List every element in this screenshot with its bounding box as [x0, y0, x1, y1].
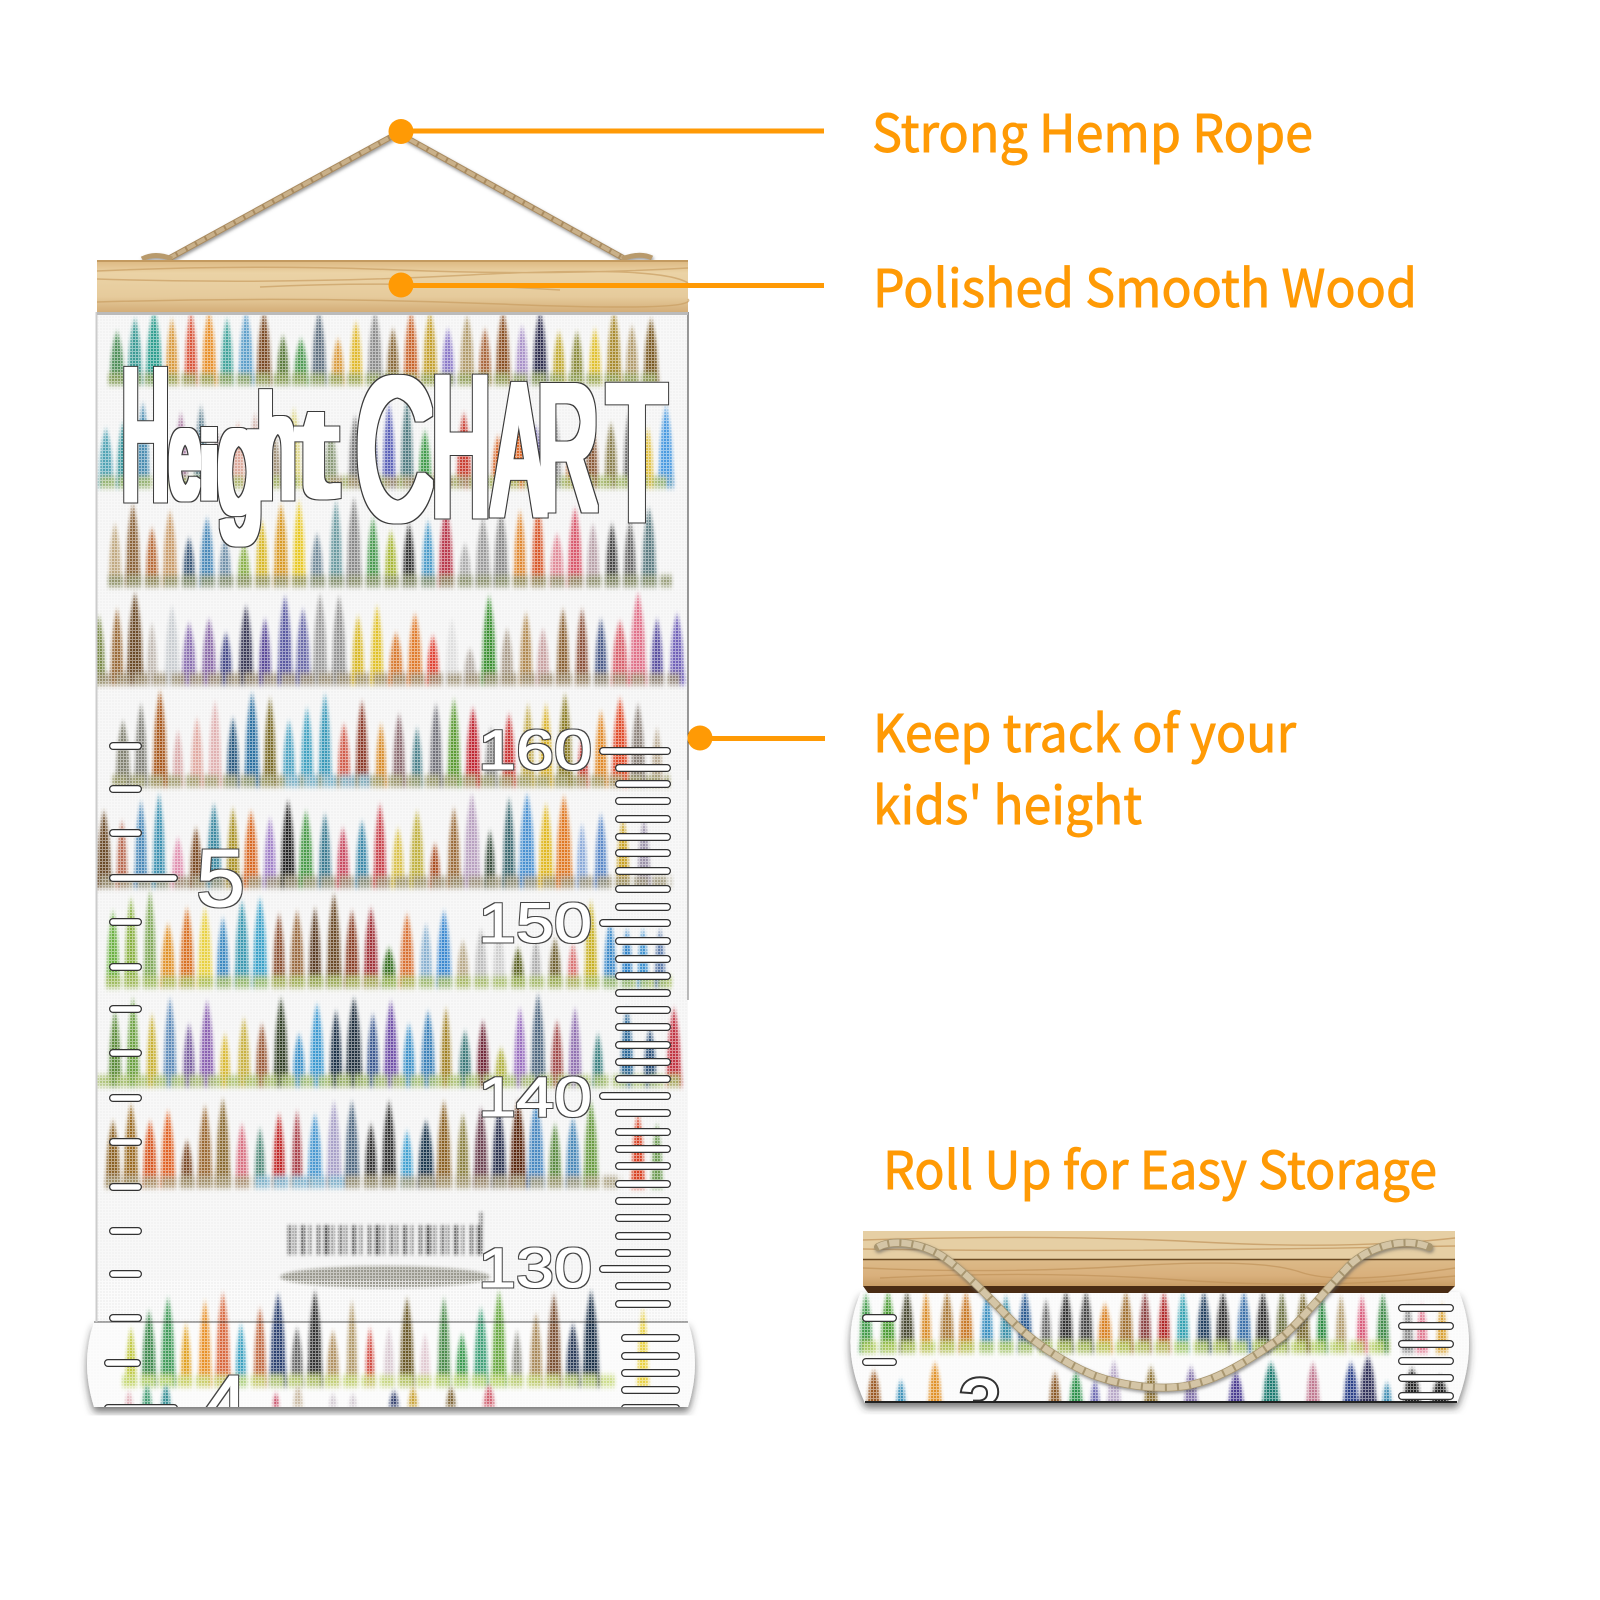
folded wooden bars	[863, 1231, 1455, 1293]
title: Height CHART: e	[170, 387, 200, 523]
number 4 cropped by roll: 4	[202, 1359, 248, 1448]
ruler numbers: 160	[478, 718, 592, 781]
sample figures beside 130 mark	[280, 1212, 490, 1288]
title: Height CHART: H	[432, 336, 490, 558]
figures row 4	[92, 592, 685, 685]
figures row 1	[108, 311, 660, 385]
title: Height CHART: h	[258, 366, 295, 528]
callout: Keep track of your kids' height	[688, 692, 1297, 839]
figures row 3	[108, 497, 672, 587]
hanging rope	[142, 133, 652, 259]
title: Height CHART: R	[537, 348, 598, 547]
figures row 2	[98, 398, 674, 488]
figures on rolled canvas	[856, 1292, 1457, 1403]
ruler ends cropped by roll	[104, 1404, 680, 1407]
canvas sheet with printed figures	[92, 311, 688, 1324]
figures row 8	[97, 993, 682, 1087]
ruler numbers: 150	[478, 891, 592, 954]
feet ruler left	[108, 746, 174, 1363]
panel: hanging height chart	[85, 133, 705, 1448]
canvas roll at bottom	[87, 1322, 695, 1407]
callout: Keep track of your kids' height: Keep track of your	[873, 692, 1297, 767]
callout: Strong Hemp Rope: Strong Hemp Rope	[872, 92, 1313, 167]
number 3 cropped by roll: 3	[958, 1361, 1002, 1450]
callout: Polished Smooth Wood: Polished Smooth Wood	[873, 247, 1417, 322]
title: Height CHART: H	[122, 329, 169, 539]
title: Height CHART: i	[198, 415, 220, 517]
heading: Roll Up for Easy Storage: Roll Up for Easy Storage	[883, 1129, 1437, 1204]
title: Height CHART: T	[607, 345, 667, 561]
ruler numbers: 140	[478, 1065, 592, 1128]
title: Height CHART: t	[295, 384, 338, 521]
panel: rolled-up product	[844, 1231, 1475, 1414]
callout: Keep track of your kids' height: kids' height	[873, 764, 1142, 839]
figures row 5	[112, 690, 670, 787]
ruler numbers: 130	[478, 1236, 592, 1299]
title: Height CHART: A	[493, 347, 545, 555]
title: Height CHART	[122, 329, 667, 562]
figures row 7	[106, 890, 672, 988]
rolled rulers	[866, 1308, 1450, 1396]
title: Height CHART: g	[218, 377, 262, 544]
lower cropped figures on rolled canvas	[867, 1356, 1449, 1406]
wooden top bar	[97, 260, 689, 315]
figures row 11 cropped by roll	[125, 1385, 495, 1407]
figures row 6	[96, 793, 672, 888]
storage rope	[878, 1243, 1429, 1388]
figures row 10 on roll	[120, 1280, 651, 1407]
figures row 9	[105, 1098, 663, 1188]
callout: Polished Smooth Wood	[388, 247, 1417, 322]
ruler numbers	[196, 718, 592, 1299]
ruler numbers: 5	[196, 833, 245, 924]
callout: Strong Hemp Rope	[388, 92, 1313, 167]
centimetre ruler right	[603, 751, 676, 1390]
rolled canvas	[850, 1292, 1469, 1403]
title: Height CHART: C	[356, 339, 434, 562]
